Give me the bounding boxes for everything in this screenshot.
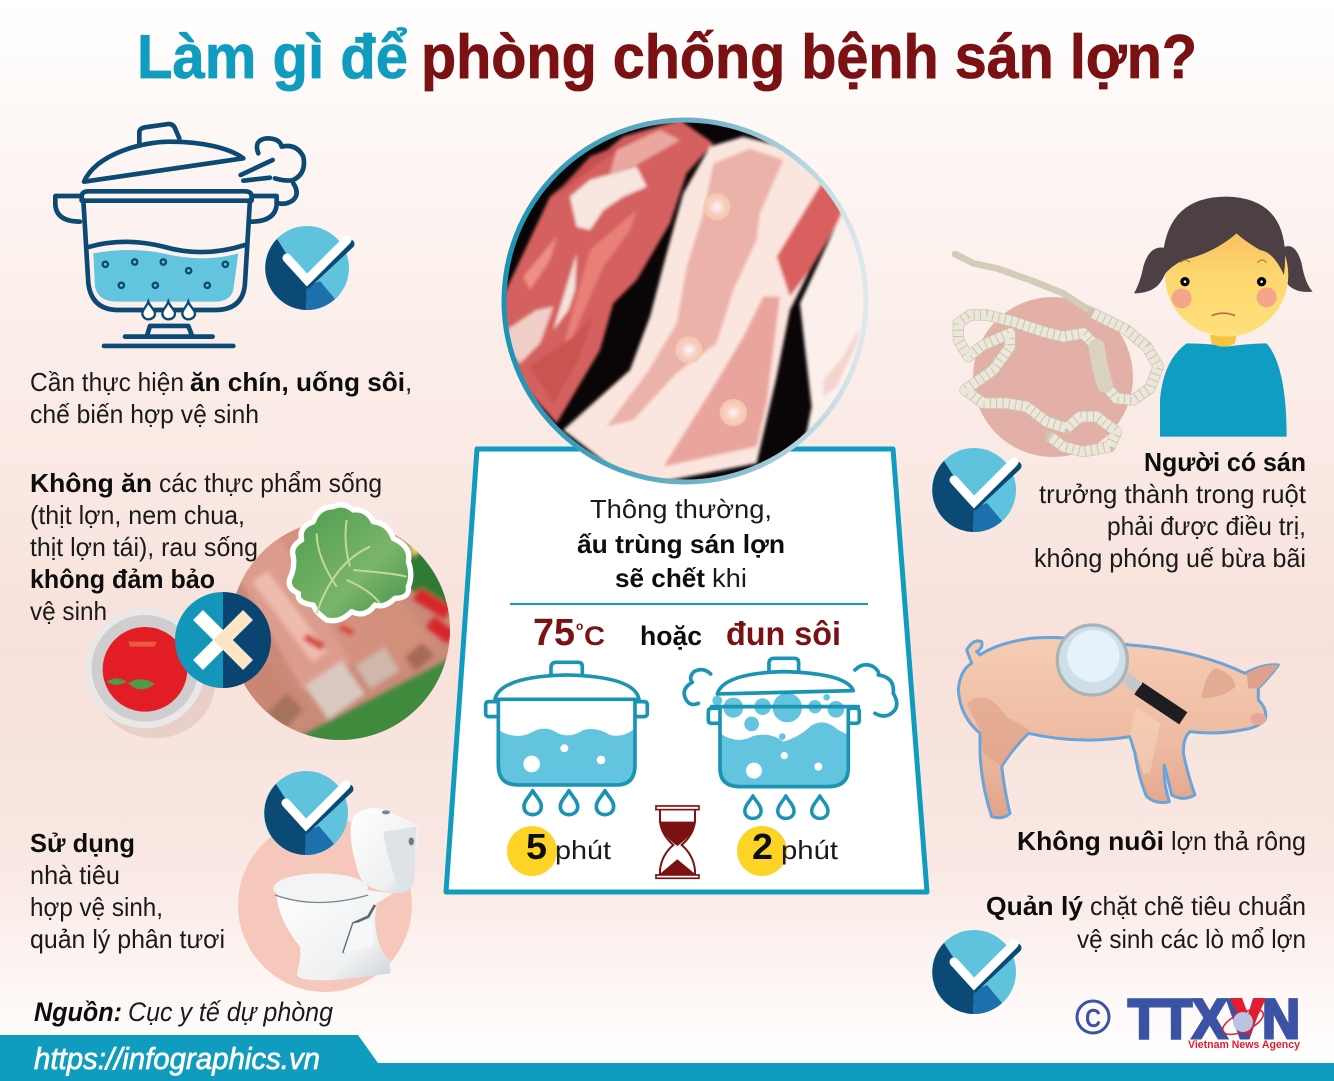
logo: TTXVN: Vietnam News Agency <box>1188 1039 1301 1051</box>
text: do not free-range pigs <box>1017 826 1306 856</box>
text: do not eat raw food: vệ sinh <box>30 596 107 626</box>
title: Làm gì để <box>137 23 408 92</box>
text: cook thoroughly <box>30 367 412 429</box>
icon: hourglass <box>656 806 699 878</box>
icon: steaming pot on stove <box>55 124 304 346</box>
panel intro text: khi <box>712 563 747 593</box>
source: Nguồn: <box>34 997 122 1027</box>
temperature 75 C: o <box>576 619 583 633</box>
text: use hygienic latrines: Sử dụng <box>30 828 135 858</box>
badge: 2 minutes: 2 <box>752 826 773 867</box>
icon: check mark, treatment <box>932 448 1017 532</box>
icon: check mark, toilet <box>264 771 349 855</box>
logo: TTXVN: TTXVN <box>1128 987 1300 1050</box>
illustration: pig with magnifier <box>958 625 1278 818</box>
panel intro text: sẽ chết <box>615 563 705 593</box>
text: people with tapeworm <box>1034 447 1307 573</box>
or label: hoặc <box>640 621 702 651</box>
lettuce leaf <box>289 505 411 621</box>
text: people with tapeworm: phải được điều trị, <box>1107 511 1306 541</box>
icon: check mark, cooked food <box>265 226 350 310</box>
text: do not eat raw food: (thịt lợn, nem chua, <box>30 500 245 530</box>
text: people with tapeworm: trưởng thành trong ruột <box>1039 479 1307 509</box>
badge: 5 minutes: 5 <box>526 826 547 867</box>
badge: 2 minutes <box>737 826 839 876</box>
badge: 5 minutes: phút <box>555 835 612 865</box>
text: do not free-range pigs: Không nuôi <box>1017 826 1164 856</box>
badge: 5 minutes <box>507 826 612 876</box>
text: cook thoroughly: , <box>405 367 412 397</box>
text: cook thoroughly: Cần thực hiện <box>30 367 184 397</box>
text: use hygienic latrines <box>30 828 225 954</box>
icon: dipping sauce bowl <box>85 608 215 738</box>
text: do not eat raw food <box>30 468 382 626</box>
text: cook thoroughly: ăn chín, uống sôi <box>190 367 405 397</box>
icon: check mark, slaughterhouse <box>932 930 1017 1014</box>
panel intro text: ấu trùng sán lợn <box>577 529 785 559</box>
panel intro text <box>577 494 785 593</box>
text: do not eat raw food: thịt lợn tái), rau sống <box>30 532 258 562</box>
text: use hygienic latrines: nhà tiêu <box>30 860 120 890</box>
badge: 2 minutes: phút <box>781 835 839 865</box>
source: Cục y tế dự phòng <box>128 997 333 1027</box>
text: people with tapeworm: Người có sán <box>1144 447 1306 477</box>
photo: raw pork with larvae <box>502 118 868 484</box>
source <box>34 997 333 1027</box>
text: use hygienic latrines: hợp vệ sinh, <box>30 892 163 922</box>
illustration: sad girl <box>1134 197 1313 437</box>
footer bar with url <box>0 1035 1334 1081</box>
text: manage slaughterhouses: vệ sinh các lò mổ lợn <box>1077 924 1306 954</box>
text: manage slaughterhouses: chặt chẽ tiêu chuẩn <box>1090 891 1306 921</box>
icon: boiling pot <box>684 658 897 818</box>
text: do not free-range pigs: lợn thả rông <box>1171 826 1306 856</box>
text: manage slaughterhouses: Quản lý <box>986 891 1084 921</box>
text: cook thoroughly: chế biến hợp vệ sinh <box>30 399 259 429</box>
title: phòng chống bệnh sán lợn? <box>421 23 1197 92</box>
logo: TTXVN: C <box>1085 1003 1101 1033</box>
text: use hygienic latrines: quản lý phân tươi <box>30 924 225 954</box>
text: do not eat raw food: Không ăn <box>30 468 152 498</box>
icon: toilet <box>238 808 419 992</box>
illustration: tapeworm <box>955 254 1158 457</box>
temperature 75 C: 75 <box>533 612 575 654</box>
boil label: đun sôi <box>726 615 841 652</box>
text: do not eat raw food: các thực phẩm sống <box>159 468 382 498</box>
panel: kill conditions <box>446 449 927 892</box>
text: people with tapeworm: không phóng uế bừa bãi <box>1034 543 1306 573</box>
temperature 75 C <box>533 612 605 654</box>
text: do not eat raw food: không đảm bảo <box>30 564 215 594</box>
photo: raw nem rolls and lettuce <box>217 505 453 743</box>
footer bar with url: https://infographics.vn <box>34 1041 320 1076</box>
title <box>137 23 1197 92</box>
panel intro text: Thông thường, <box>590 494 772 524</box>
icon: pot at 75 C <box>486 662 647 815</box>
icon: cross mark <box>175 592 271 688</box>
text: manage slaughterhouses <box>986 891 1306 954</box>
temperature 75 C: C <box>584 621 605 651</box>
